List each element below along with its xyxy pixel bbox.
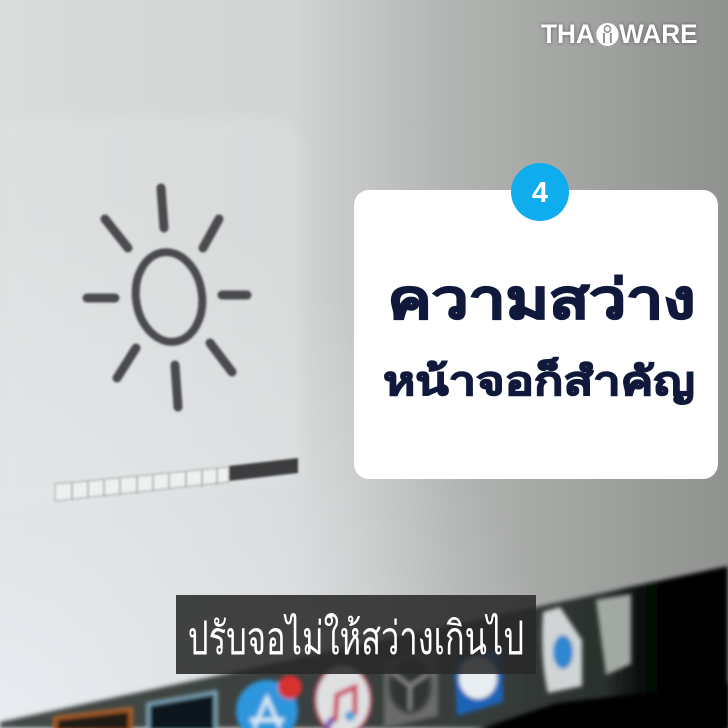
icon: dark app	[148, 692, 216, 728]
icon: blue app	[454, 648, 503, 716]
caption: ปรับจอไม่ให้สว่างเกินไป	[188, 612, 524, 664]
brightness overlay panel	[0, 118, 302, 510]
heading line 2: หน้าจอก็สำคัญ	[383, 360, 695, 404]
icon: notification badge	[278, 675, 302, 699]
number badge	[511, 163, 569, 221]
logo: Thaiware: THA WARE	[541, 19, 698, 49]
heading line 1: ความสว่าง	[388, 270, 695, 330]
icon: app store	[236, 680, 298, 728]
icon: document	[542, 607, 582, 693]
number badge: 4	[532, 177, 548, 209]
icon: trash	[596, 594, 631, 675]
dock icons	[55, 594, 631, 728]
brightness level bar	[55, 458, 298, 501]
icon: itunes	[315, 665, 371, 728]
dock shadow	[470, 683, 728, 728]
caption	[176, 595, 536, 674]
icon: orange app	[55, 709, 131, 728]
icon: system preferences	[384, 650, 438, 728]
icon: sun brightness	[87, 188, 247, 407]
dock bar	[0, 566, 728, 728]
panel: title card	[354, 190, 718, 479]
